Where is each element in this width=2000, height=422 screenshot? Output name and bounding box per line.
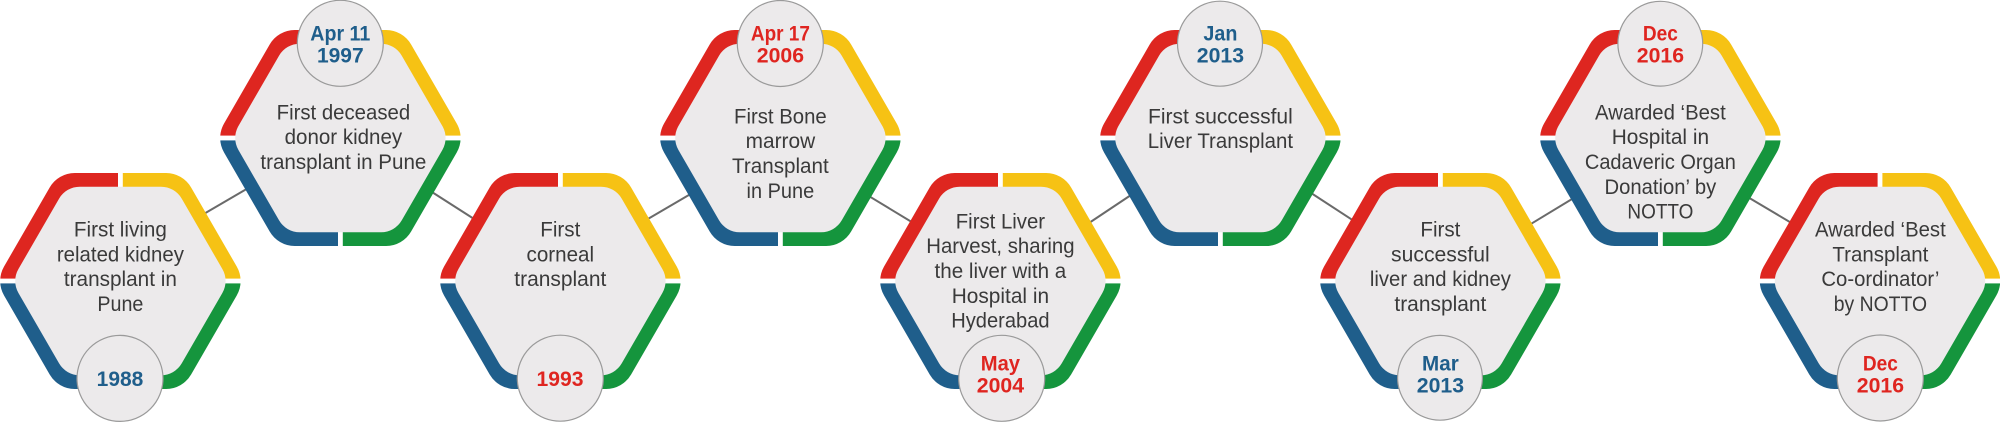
milestone 6: Jan 2013 [1098,1,1342,247]
description: related kidney [57,244,184,266]
hexagon frame [1538,29,1782,247]
description: the liver with a [935,260,1067,283]
description: Hospital in [952,285,1049,308]
date badge [959,335,1045,421]
description: Awarded ‘Best [1595,101,1726,124]
date badge [1398,335,1482,420]
description: by NOTTO [1834,293,1927,316]
description: in Pune [747,180,814,203]
date badge [77,335,163,421]
date badge [517,335,603,421]
description: Hospital in [1612,126,1709,149]
date badge: 1997 [317,44,364,67]
description: successful [1391,244,1490,266]
date badge: 2016 [1857,374,1904,397]
description: First living [74,219,167,242]
date badge [1618,1,1703,86]
date badge [1837,335,1923,421]
description: Liver Transplant [1148,130,1293,153]
description: Transplant [1832,244,1929,266]
description: Donation’ by [1605,176,1717,199]
date badge: 2013 [1417,374,1464,397]
hexagon frame [878,172,1122,390]
milestone 5: May 2004 [878,172,1122,421]
description: NOTTO [1627,201,1693,224]
description: donor kidney [285,126,403,149]
hexagon frame [438,172,682,390]
date badge: Dec [1643,23,1678,46]
date badge: 2013 [1197,44,1244,67]
description: Pune [97,293,143,316]
date badge: Apr 11 [310,23,371,46]
hexagon frame [658,29,902,247]
hexagon frame [1098,29,1342,247]
description: First successful [1148,105,1293,128]
description: corneal [527,243,594,266]
description: First Liver [956,210,1045,233]
date badge: 1988 [97,368,144,391]
milestone 8: Dec 2016 [1538,1,1782,247]
description [926,210,1075,333]
date badge: Mar [1422,353,1459,376]
description: Harvest, sharing [926,235,1075,258]
hexagon frame [1758,172,2000,390]
milestone 3: 1993 [438,172,682,421]
description [1370,219,1511,316]
description: transplant [1394,293,1487,316]
description: Hyderabad [951,310,1050,333]
description [1585,101,1736,224]
description: First deceased [277,101,410,124]
hexagon frame [0,172,242,390]
milestone 9: Dec 2016 [1758,172,2000,421]
description: marrow [746,130,816,153]
date badge [737,0,823,86]
description: transplant in Pune [260,151,426,174]
description: liver and kidney [1370,268,1511,291]
date badge: 2006 [757,44,804,67]
description [1815,219,1946,316]
description [57,219,184,316]
milestone 1: 1988 [0,172,242,421]
milestone 4: Apr 17 2006 [658,0,902,247]
date badge: Jan [1203,23,1237,46]
description [514,219,607,291]
date badge: Apr 17 [751,23,810,46]
description: First [1420,219,1461,242]
description: Co-ordinator’ [1821,268,1939,291]
description [732,105,829,203]
date badge [1178,1,1262,86]
milestone 7: Mar 2013 [1318,172,1562,420]
description: Transplant [732,155,829,178]
date badge: May [981,353,1020,376]
description [260,101,426,174]
description [1148,105,1293,153]
description: Cadaveric Organ [1585,151,1736,174]
hexagon frame [1318,172,1562,390]
date badge: 2016 [1637,44,1684,67]
description: First [540,219,581,242]
milestone 2: Apr 11 1997 [218,0,462,247]
connector lines [202,187,1794,226]
description: Awarded ‘Best [1815,219,1946,242]
description: transplant in [64,268,177,291]
description: First Bone [734,105,827,128]
date badge: 2004 [977,374,1024,397]
date badge: 1993 [536,368,584,391]
description: transplant [514,268,607,291]
date badge: Dec [1863,353,1898,376]
date badge [297,0,383,86]
hexagon frame [218,29,462,247]
